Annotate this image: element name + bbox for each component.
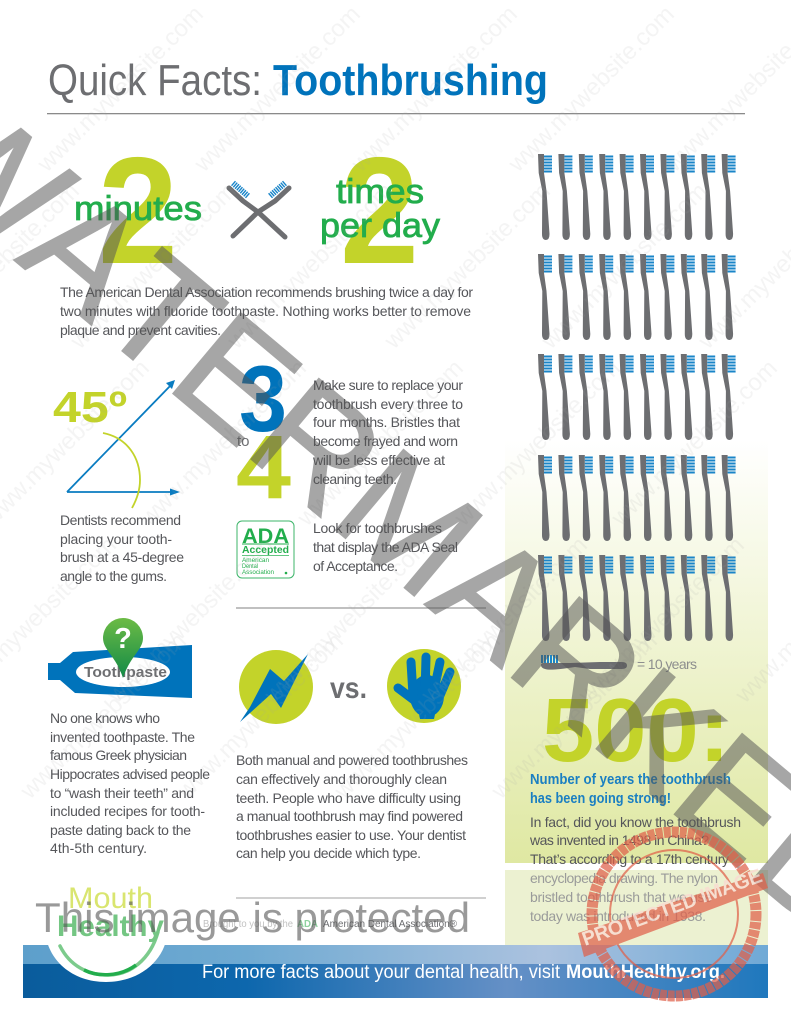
- stat: 3 to 4 months: [236, 346, 291, 518]
- text: brought to you by ADA: ADA: [297, 919, 318, 930]
- text: replace toothbrush: four months. Bristles that: [313, 414, 460, 430]
- heading: years going strong: has been going strong!: [530, 791, 671, 807]
- text: ADA seal advice: Look for toothbrushes: [313, 520, 442, 536]
- title: [48, 56, 548, 105]
- footer banner: MouthHealthy.org.: [566, 962, 725, 983]
- text: toothpaste history: No one knows who: [50, 710, 160, 726]
- text: angle advice: angle to the gums.: [60, 568, 167, 584]
- icon: crossed toothbrushes: [229, 183, 289, 237]
- text: replace toothbrush: will be less effective at: [312, 452, 445, 468]
- text: manual vs powered: Both manual and powered toothbrushes: [236, 752, 468, 768]
- legend: one brush equals 10 years: [541, 655, 697, 672]
- text: toothpaste history: Hippocrates advised people: [50, 766, 210, 782]
- title: Quick Facts:: [48, 56, 262, 105]
- watermark: small repeating site address: www.mywebsite.com: [378, 178, 556, 355]
- stamp: protected image: [578, 832, 768, 996]
- heading: years going strong: [530, 772, 731, 807]
- text: brought to you by ADA: [203, 919, 458, 930]
- text: manual vs powered: a manual toothbrush may find powered: [236, 808, 463, 824]
- text: toothbrush history: was invented in 1498 in China?: [529, 832, 709, 848]
- text: ADA seal advice: [313, 520, 458, 574]
- icon: ADA seal: Dental: [242, 564, 258, 570]
- stat: 2 minutes: 2: [98, 126, 178, 296]
- watermark: small repeating site address: www.mywebsite.com: [101, 532, 279, 709]
- icon: ADA seal: [237, 521, 294, 578]
- watermark: small repeating site address: www.mywebsite.com: [31, 1, 209, 178]
- watermark: small repeating site address: www.mywebsite.com: [258, 532, 436, 709]
- text: ADA seal advice: that display the ADA Seal: [313, 539, 458, 555]
- watermark: this image is protected: This image is protected: [35, 894, 470, 941]
- text: toothpaste history: included recipes for tooth-: [50, 803, 205, 819]
- watermark: small repeating site address: www.mywebsite.com: [221, 178, 399, 355]
- text: angle advice: brush at a 45-degree: [60, 549, 184, 565]
- stat: 3 to 4 months: 3: [239, 346, 287, 451]
- text: manual vs powered: toothbrushes easier to use. Your dentist: [236, 827, 466, 843]
- text: toothbrush history: [529, 814, 741, 924]
- logo: MouthHealthy: Healthy: [57, 910, 164, 943]
- stamp: protected image: PROTECTED IMAGE: [579, 865, 765, 951]
- icon: manual toothbrush hand: [387, 649, 461, 723]
- icon: ADA seal: ADA: [242, 525, 289, 548]
- stat: 2 times per day: 2: [340, 126, 419, 296]
- logo: MouthHealthy: [45, 882, 168, 982]
- icon: ADA seal: Association: [242, 570, 274, 576]
- text: toothbrush history: That’s according to a 17th century: [530, 851, 729, 867]
- icon: ADA seal: American: [242, 558, 269, 564]
- watermark: small repeating site address: www.mywebsite.com: [328, 628, 506, 805]
- text: toothbrush history: today was introduced in 1938.: [530, 908, 706, 924]
- watermark: small repeating site address: www.mywebsite.com: [345, 1, 523, 178]
- text: toothbrush history: encyclopedia drawing. The nylon: [530, 870, 718, 886]
- watermark: small repeating site address: www.mywebsite.com: [171, 628, 349, 805]
- logo: MouthHealthy: Mouth: [68, 882, 153, 915]
- text: ADA recommendation: plaque and prevent cavities.: [60, 322, 221, 338]
- text: toothpaste history: 4th-5th century.: [50, 840, 147, 856]
- stat: 2 times per day: times: [336, 173, 424, 211]
- text: replace toothbrush: become frayed and worn: [313, 433, 458, 449]
- watermark: small repeating site address: www.mywebsite.com: [291, 355, 469, 532]
- text: replace toothbrush: cleaning teeth.: [313, 471, 397, 487]
- legend: one brush equals 10 years: = 10 years: [637, 656, 697, 672]
- watermark: small repeating site address: www.mywebsite.com: [188, 1, 366, 178]
- watermark: small repeating site address: www.mywebsite.com: [502, 1, 680, 178]
- watermark: small repeating site address: www.mywebsite.com: [64, 178, 242, 355]
- title: Toothbrushing: [273, 56, 548, 105]
- text: toothpaste history: paste dating back to the: [50, 822, 191, 838]
- icon: powered toothbrush lightning: [239, 650, 313, 724]
- icon: toothpaste tube: Toothpaste: [84, 664, 167, 681]
- watermark: small repeating site address: [0, 1, 791, 805]
- text: angle advice: placing your tooth-: [60, 531, 172, 547]
- icon: toothpaste tube: ?: [114, 623, 132, 655]
- text: toothpaste history: [50, 710, 210, 856]
- watermark: small repeating site address: www.mywebsite.com: [572, 532, 750, 709]
- stat: 3 to 4 months: to: [237, 433, 250, 450]
- watermark: small repeating site address: www.mywebsite.com: [415, 532, 593, 709]
- text: toothbrush history: In fact, did you know the toothbrush: [530, 814, 741, 830]
- text: manual vs powered: teeth. People who have difficulty using: [236, 790, 461, 806]
- stat: 500: 500:: [542, 681, 730, 781]
- text: manual vs powered: [236, 752, 468, 861]
- stat: 3 to 4 months: 4: [236, 418, 291, 518]
- stat: 45 degrees: 45º: [53, 383, 127, 432]
- text: replace toothbrush: toothbrush every three to: [313, 396, 463, 412]
- text: replace toothbrush: Make sure to replace your: [313, 377, 463, 393]
- text: ADA seal advice: of Acceptance.: [313, 558, 398, 574]
- text: toothbrush history: bristled toothbrush that we use: [530, 889, 712, 905]
- text: manual vs powered: can help you decide which type.: [236, 845, 421, 861]
- footer banner: [23, 945, 768, 998]
- footer banner: For more facts about your dental health, visit: [202, 962, 561, 983]
- chart: 500 years of toothbrushes pictogram: [538, 154, 736, 641]
- stat: 2 minutes: [74, 126, 202, 296]
- watermark: small repeating site address: www.mywebsite.com: [134, 355, 312, 532]
- text: toothpaste history: to “wash their teeth” and: [50, 785, 194, 801]
- watermark: small repeating site address: www.mywebsite.com: [605, 355, 783, 532]
- icon: ADA seal: Accepted: [242, 545, 289, 556]
- panel: toothbrush history background: [505, 440, 768, 946]
- diagram: brushing angle: [67, 380, 180, 508]
- watermark: small repeating site address: www.mywebsite.com: [485, 628, 663, 805]
- stat: 2 minutes: minutes: [74, 190, 202, 228]
- watermark: small repeating site address: www.mywebsite.com: [448, 355, 626, 532]
- text: ADA recommendation: two minutes with fluoride toothpaste. Nothing works better to remove: [60, 303, 471, 319]
- label: vs.: vs.: [330, 672, 367, 705]
- text: replace toothbrush: [312, 377, 463, 487]
- icon: toothpaste tube: [48, 618, 192, 698]
- text: brought to you by ADA: Brought to you by the: [203, 919, 293, 930]
- stat: 2 times per day: per day: [320, 207, 440, 245]
- heading: years going strong: Number of years the toothbrush: [530, 772, 731, 788]
- watermark: small repeating site address: www.mywebsite.com: [14, 628, 192, 805]
- text: toothpaste history: famous Greek physician: [50, 747, 187, 763]
- text: ADA recommendation: [60, 284, 473, 338]
- watermark: small repeating site address: www.mywebsite.com: [535, 178, 713, 355]
- text: angle advice: Dentists recommend: [60, 512, 181, 528]
- text: angle advice: [60, 512, 184, 584]
- text: brought to you by ADA: American Dental Association®: [323, 919, 458, 930]
- text: ADA recommendation: The American Dental Association recommends brushing twice a day for: [60, 284, 473, 300]
- text: toothpaste history: invented toothpaste. The: [50, 729, 195, 745]
- text: manual vs powered: can effectively and thoroughly clean: [236, 771, 447, 787]
